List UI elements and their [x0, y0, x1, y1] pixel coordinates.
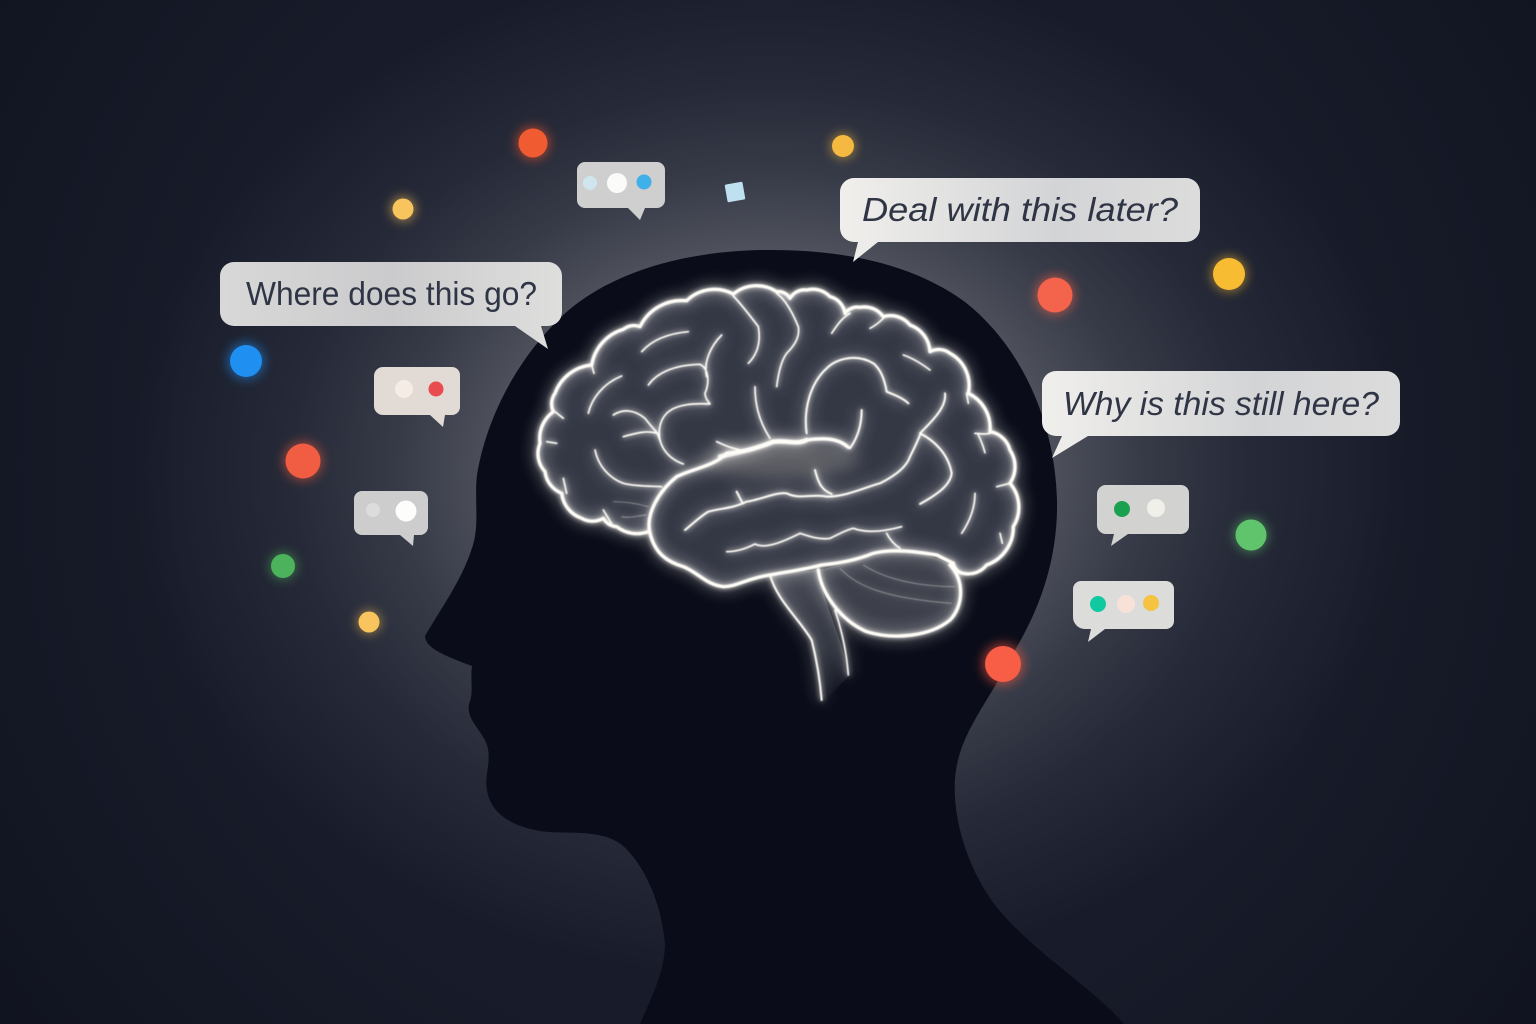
frontal folds [588, 332, 722, 487]
speech bubble: deal with this later [840, 178, 1200, 262]
speech bubble: deal with this later: Deal with this later? [862, 191, 1179, 228]
temporal lobe outline [649, 439, 953, 587]
upper and rear folds [547, 313, 1010, 543]
brain illustration [538, 286, 1019, 703]
square confetti [725, 182, 745, 202]
speech bubble: why is this still here: Why is this still here? [1063, 385, 1380, 422]
brain glowing outlines [538, 286, 1019, 700]
dot: yellow top centre [830, 133, 856, 159]
dot: green left [269, 552, 297, 580]
dot: orange top [516, 126, 550, 160]
small bubble: blue dots [577, 162, 665, 220]
dot: blue [227, 342, 265, 380]
speech bubble: where does this go [220, 262, 562, 349]
head silhouette [425, 250, 1124, 1024]
dot: red on head edge [982, 643, 1024, 685]
small bubble: green dot [1097, 485, 1189, 546]
central sulci [717, 293, 799, 450]
dot: red upper right [1035, 275, 1075, 315]
dot: red left [283, 441, 323, 481]
inferior groove [727, 527, 902, 552]
speech bubble: why is this still here [1042, 371, 1400, 458]
small bubble: white dot [354, 491, 428, 546]
cerebellum outline [818, 565, 961, 636]
dot: amber right [1211, 256, 1247, 292]
small bubble: red dot [374, 367, 460, 427]
brain fill [538, 286, 1019, 703]
cerebrum outline [538, 286, 1019, 574]
dot: green right [1234, 518, 1268, 552]
cerebellum lines [613, 502, 955, 603]
parietal ridge [920, 393, 952, 504]
brain stem outline [770, 575, 822, 700]
small bubble: teal and amber dots [1073, 581, 1174, 642]
arch fold [806, 358, 908, 448]
speech bubble: where does this go: Where does this go? [246, 275, 537, 312]
dot: yellow lower left [357, 610, 381, 634]
dot: yellow upper left [390, 196, 416, 222]
lower temporal groove [685, 435, 920, 530]
central bright ridge [720, 440, 807, 457]
